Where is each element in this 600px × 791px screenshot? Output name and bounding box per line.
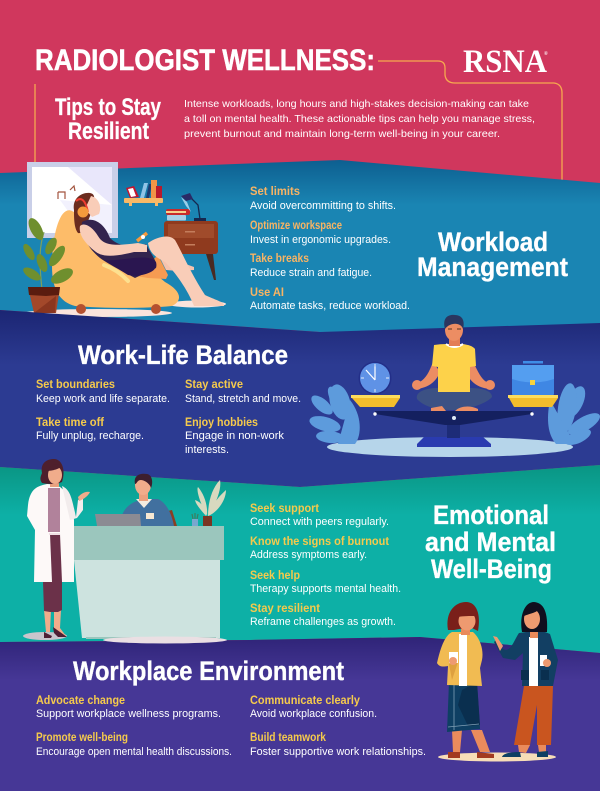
illustration: woman relaxing in beanbag chair bbox=[21, 162, 226, 317]
intro text: a toll on mental health. These actionable tips can help you manage stress, bbox=[184, 113, 535, 125]
title: RADIOLOGIST WELLNESS: bbox=[35, 44, 375, 77]
tips: emotional and mental well-being: Stay resilient bbox=[250, 603, 320, 615]
heading: Workload Management bbox=[417, 227, 568, 282]
subtitle bbox=[55, 94, 162, 145]
illustration: man meditating on balance scale bbox=[308, 315, 600, 457]
heading: Workload Management: Workload bbox=[438, 227, 548, 257]
tips: work-life balance: Engage in non-work bbox=[185, 430, 285, 442]
tips: emotional and mental well-being: Therapy supports mental health. bbox=[250, 583, 401, 595]
tips: work-life balance: Keep work and life separate. bbox=[36, 393, 170, 405]
heading: Workload Management: Management bbox=[417, 252, 568, 282]
tips: workload: Reduce strain and fatigue. bbox=[250, 267, 372, 279]
tips: emotional and mental well-being: Reframe challenges as growth. bbox=[250, 616, 396, 628]
tips: emotional and mental well-being: Connect with peers regularly. bbox=[250, 516, 389, 528]
tips: workload: Automate tasks, reduce workload. bbox=[250, 300, 410, 312]
panel: Emotional and Mental Well-Being bbox=[0, 459, 600, 653]
heading: Emotional and Mental Well-Being: Well-Being bbox=[431, 554, 552, 584]
illustration: two colleagues talking with coffee bbox=[437, 602, 558, 762]
heading: Work-Life Balance: Work-Life Balance bbox=[78, 340, 288, 370]
heading: Emotional and Mental Well-Being: and Mental bbox=[425, 527, 556, 557]
tips: workplace environment bbox=[36, 695, 426, 758]
tips: emotional and mental well-being: Seek help bbox=[250, 570, 300, 582]
tips: work-life balance: Set boundaries bbox=[36, 379, 115, 391]
heading: Emotional and Mental Well-Being bbox=[425, 500, 556, 584]
subtitle: Resilient bbox=[68, 118, 149, 145]
panel: Work-Life Balance bbox=[0, 310, 600, 487]
intro text: Intense workloads, long hours and high-stakes decision-making can take bbox=[184, 98, 529, 110]
tips: work-life balance: Stay active bbox=[185, 379, 243, 391]
tips: emotional and mental well-being bbox=[250, 503, 401, 628]
tips: workload: Invest in ergonomic upgrades. bbox=[250, 234, 391, 246]
tips: work-life balance: Stand, stretch and move. bbox=[185, 393, 301, 405]
tips: work-life balance: interests. bbox=[185, 444, 229, 456]
panel: Workload Management bbox=[0, 160, 600, 332]
logo: RSNA: RSNA bbox=[463, 44, 547, 80]
tips: emotional and mental well-being: Address symptoms early. bbox=[250, 549, 367, 561]
tips: workplace environment: Advocate change bbox=[36, 695, 125, 707]
heading: Workplace Environment: Workplace Environment bbox=[73, 656, 344, 686]
panel: Workplace Environment bbox=[0, 602, 600, 791]
tips: workplace environment: Encourage open mental health discussions. bbox=[36, 746, 232, 758]
tips: workplace environment: Communicate clearly bbox=[250, 695, 361, 707]
heading: Emotional and Mental Well-Being: Emotional bbox=[433, 500, 549, 530]
tips: work-life balance: Take time off bbox=[36, 417, 104, 429]
panel: header bbox=[0, 0, 600, 190]
tips: emotional and mental well-being: Seek support bbox=[250, 503, 319, 515]
tips: workload: Avoid overcommitting to shifts. bbox=[250, 200, 396, 212]
intro text bbox=[184, 98, 535, 140]
intro text: prevent burnout and maintain long-term well-being in your career. bbox=[184, 128, 500, 140]
tips: workload bbox=[250, 186, 410, 312]
logo: RSNA: ® bbox=[544, 51, 548, 57]
decorative connector line bbox=[35, 61, 562, 182]
tips: workplace environment: Foster supportive work relationships. bbox=[250, 746, 426, 758]
illustration: rug beneath reception desk bbox=[103, 636, 227, 644]
tips: workload: Set limits bbox=[250, 186, 300, 198]
tips: workplace environment: Promote well-being bbox=[36, 732, 128, 744]
tips: workplace environment: Build teamwork bbox=[250, 732, 327, 744]
subtitle: Tips to Stay bbox=[55, 94, 162, 121]
illustration: doctor and colleague at reception desk bbox=[23, 459, 226, 640]
tips: work-life balance: Fully unplug, recharge. bbox=[36, 430, 144, 442]
tips: workplace environment: Support workplace wellness programs. bbox=[36, 708, 221, 720]
tips: workplace environment: Avoid workplace confusion. bbox=[250, 708, 377, 720]
tips: work-life balance bbox=[36, 379, 301, 456]
tips: work-life balance: Enjoy hobbies bbox=[185, 417, 258, 429]
tips: workload: Take breaks bbox=[250, 253, 309, 265]
tips: workload: Optimize workspace bbox=[250, 220, 342, 232]
tips: workload: Use AI bbox=[250, 287, 284, 299]
tips: emotional and mental well-being: Know the signs of burnout bbox=[250, 536, 389, 548]
